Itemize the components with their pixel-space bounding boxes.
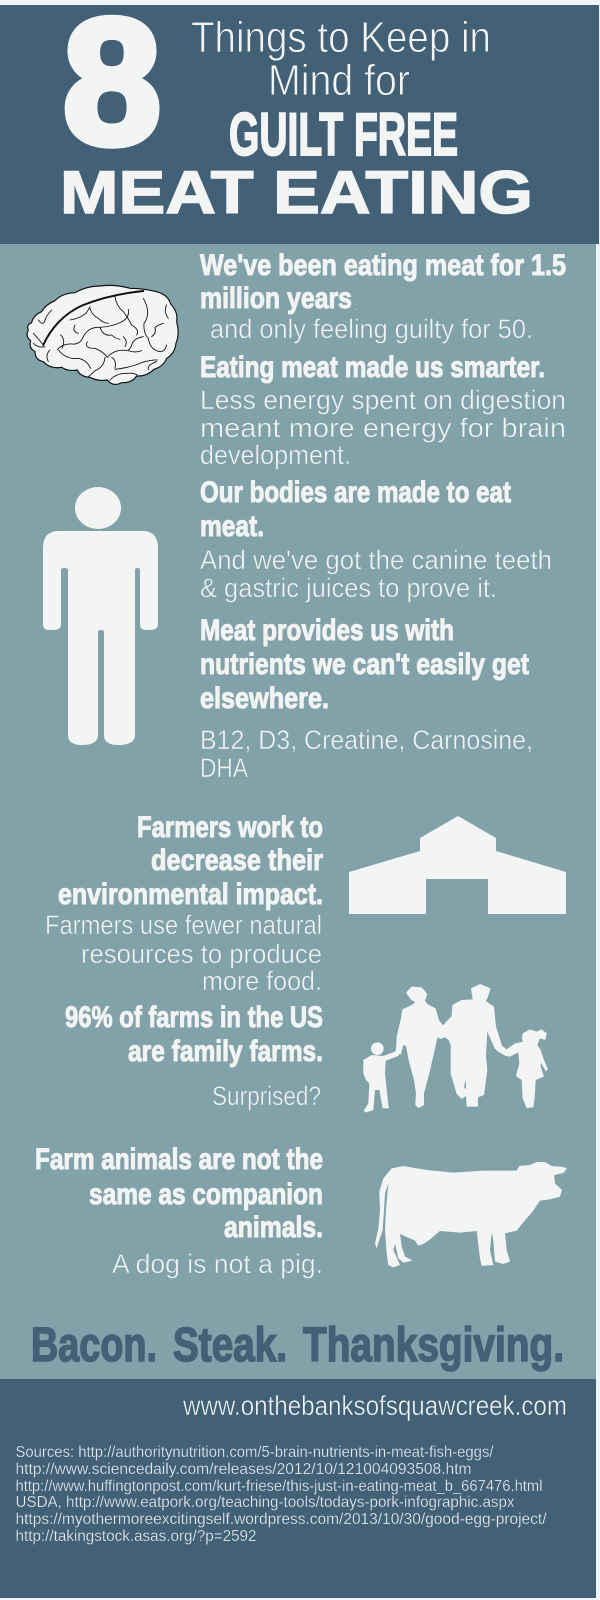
text block: farm animals vs companion animals: same as companion [89, 1178, 323, 1211]
sources list: https://myothermoreexcitingself.wordpress.com/2013/10/30/good-egg-project/ [16, 1511, 547, 1528]
text block: bodies made to eat meat: meat. [200, 510, 264, 543]
text block: eating meat made us smarter: meant more energy for brain [200, 413, 566, 443]
panel: footer [0, 1379, 596, 1598]
text block: nutrients: elsewhere. [200, 682, 329, 715]
text block: nutrients: B12, D3, Creatine, Carnosine, [200, 725, 533, 755]
text block: eating meat made us smarter: Less energy spent on digestion [200, 385, 566, 415]
icon: brain [27, 285, 178, 384]
text block: eating meat for 1.5 million years [200, 249, 566, 344]
panel: header [0, 0, 599, 244]
text block: eating meat made us smarter: development. [200, 440, 351, 470]
panel: main body [0, 244, 596, 1379]
text block: family farms: Surprised? [212, 1081, 321, 1111]
title line: Mind for: Mind for [268, 56, 410, 105]
text block: farmers environmental impact: Farmers work to [137, 811, 323, 844]
text block: bodies made to eat meat: Our bodies are made to eat [200, 476, 511, 509]
text block: farmers environmental impact: environmental impact. [58, 878, 323, 911]
sources list: http://www.sciencedaily.com/releases/2012/10/121004093508.htm [16, 1461, 472, 1478]
text block: farm animals vs companion animals [35, 1143, 323, 1279]
text block: farmers environmental impact: Farmers use fewer natural [45, 910, 322, 940]
text block: bodies made to eat meat: & gastric juices to prove it. [200, 573, 497, 603]
tagline: Bacon. Steak. Thanksgiving. [31, 1319, 564, 1372]
text block: nutrients: Meat provides us with [200, 614, 454, 647]
text block: nutrients [200, 614, 533, 783]
sources list: Sources: http://authoritynutrition.com/5-brain-nutrients-in-meat-fish-eggs/ [16, 1444, 494, 1461]
icon: family silhouette [363, 984, 548, 1113]
icon: barn [349, 816, 566, 914]
sources list: USDA, http://www.eatpork.org/teaching-tools/todays-pork-infographic.aspx [16, 1494, 514, 1511]
icon: cow silhouette [375, 1162, 567, 1267]
text block: family farms: are family farms. [128, 1035, 323, 1068]
title line: Things to Keep in: Things to Keep in [191, 13, 491, 62]
sources list [16, 1444, 547, 1545]
text block: nutrients: nutrients we can't easily get [200, 648, 529, 681]
tagline: Bacon. Steak. Thanksgiving.: Steak. [173, 1319, 287, 1372]
title line: GUILT FREE: GUILT FREE [229, 101, 458, 168]
text block: farmers environmental impact: decrease their [151, 844, 323, 877]
sources list: http://takingstock.asas.org/?p=2592 [16, 1528, 257, 1545]
text block: farmers environmental impact [45, 811, 323, 996]
text block: eating meat made us smarter [200, 351, 566, 470]
text block: farm animals vs companion animals: Farm animals are not the [35, 1143, 323, 1176]
text block: eating meat for 1.5 million years: million years [200, 282, 352, 315]
icon: human figure [43, 487, 158, 745]
text block: nutrients: DHA [200, 753, 248, 783]
text block: eating meat for 1.5 million years: and only feeling guilty for 50. [210, 314, 533, 344]
text block: farmers environmental impact: resources to produce [81, 939, 322, 969]
text block: farm animals vs companion animals: A dog is not a pig. [112, 1249, 323, 1279]
text block: farm animals vs companion animals: animals. [224, 1211, 323, 1244]
title line: MEAT EATING: MEAT EATING [60, 159, 533, 226]
text block: family farms: 96% of farms in the US [65, 1001, 323, 1034]
text block: bodies made to eat meat: And we've got the canine teeth [200, 545, 552, 575]
tagline: Bacon. Steak. Thanksgiving.: Bacon. [31, 1319, 157, 1372]
text block: family farms [65, 1001, 323, 1111]
sources list: http://www.huffingtonpost.com/kurt-friese/this-just-in-eating-meat_b_667476.html [16, 1478, 542, 1495]
text block: bodies made to eat meat [200, 476, 552, 603]
text block: farmers environmental impact: more food. [202, 966, 322, 996]
text block: eating meat for 1.5 million years: . [354, 302, 357, 312]
